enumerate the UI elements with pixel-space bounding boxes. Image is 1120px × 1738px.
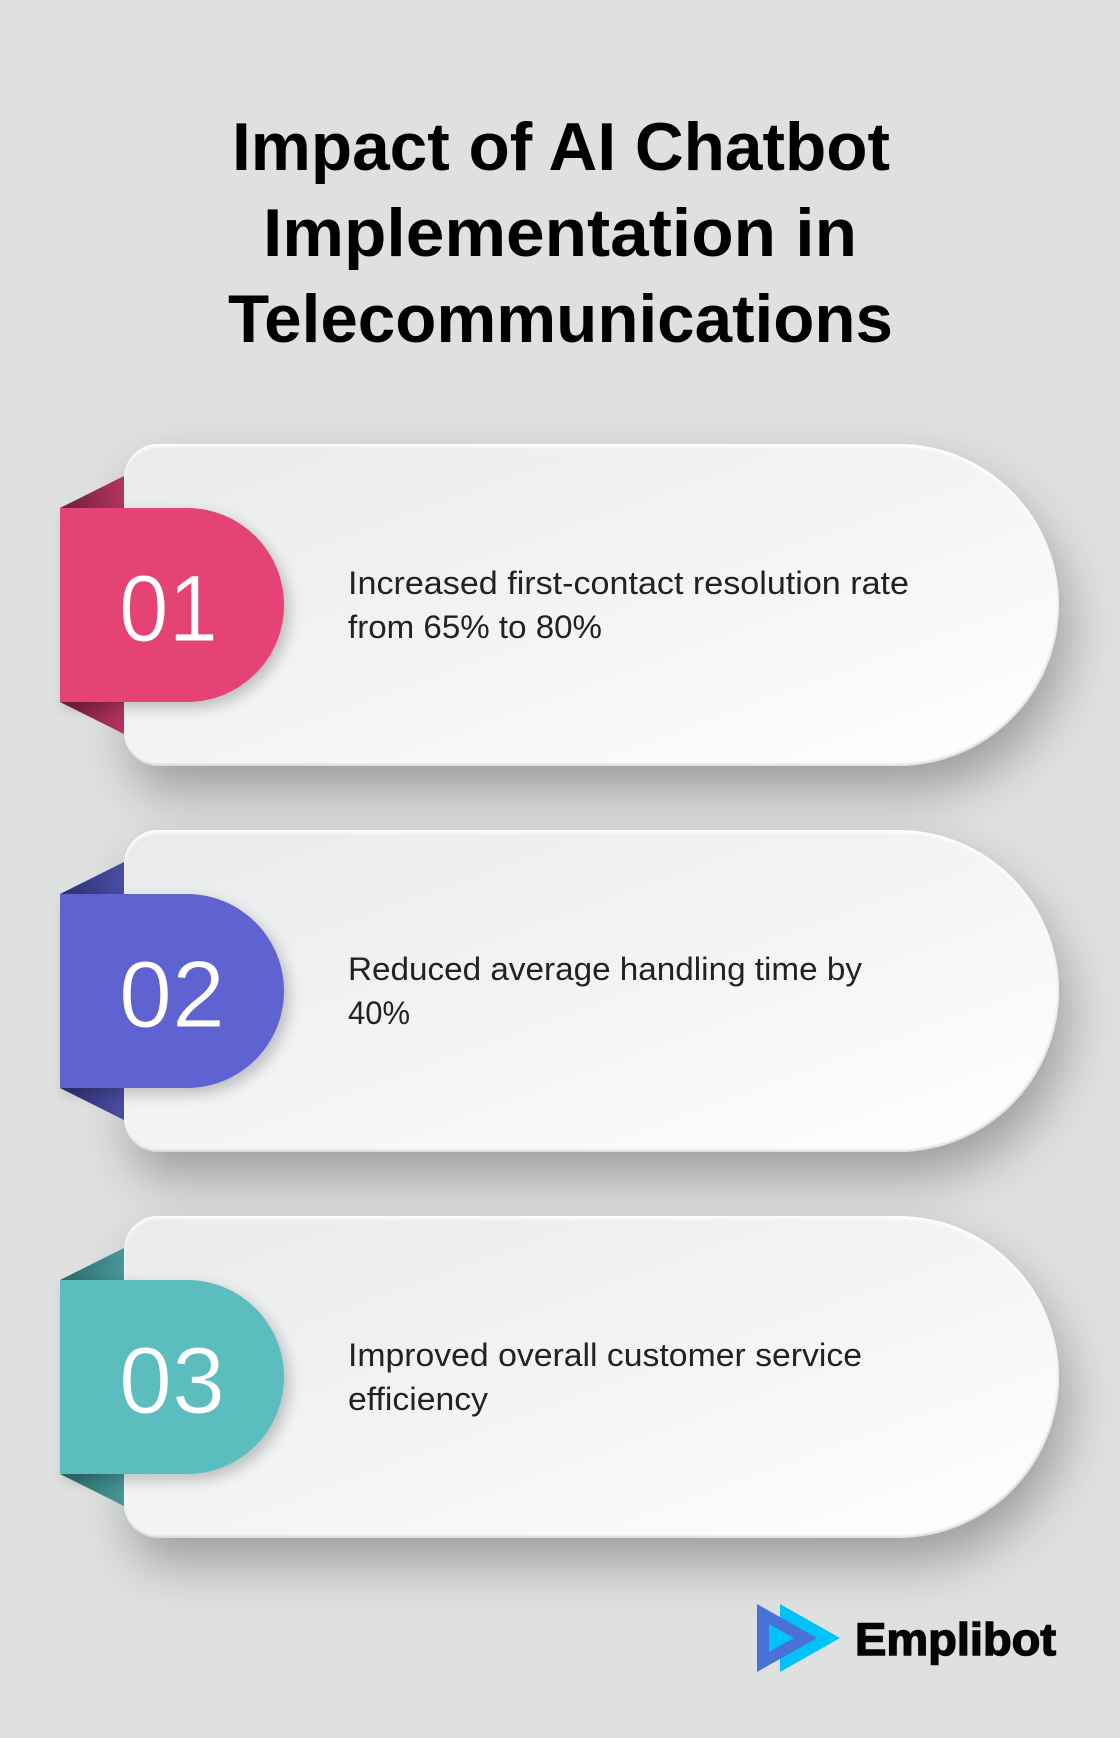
ribbon fold top xyxy=(60,1248,124,1280)
step 01 text: Increased first-contact resolution rate xyxy=(348,565,909,601)
title: Impact of AI Chatbot xyxy=(232,109,890,185)
panel: step 02 xyxy=(58,828,1093,1204)
ribbon fold bottom xyxy=(60,1088,124,1120)
ribbon fold top xyxy=(60,476,124,508)
number badge 02: 02 xyxy=(119,942,225,1048)
wordmark: Emplibot xyxy=(855,1614,1056,1665)
ribbon fold bottom xyxy=(60,1474,124,1506)
logo: Emplibot xyxy=(757,1604,1056,1672)
number badge 03: 03 xyxy=(119,1328,225,1434)
step 03 text: efficiency xyxy=(348,1381,488,1417)
step 02 text: 40% xyxy=(348,995,410,1031)
step 03 text xyxy=(348,1337,862,1417)
step 01 text xyxy=(348,565,909,645)
icon: play triangles xyxy=(757,1604,840,1672)
number badge 01: 01 xyxy=(119,556,218,662)
ribbon fold bottom xyxy=(60,702,124,734)
step 01 text: from 65% to 80% xyxy=(348,609,602,645)
card background xyxy=(124,830,1059,1152)
title: Telecommunications xyxy=(228,281,893,357)
number badge 03 xyxy=(60,1280,284,1474)
panel: step 01 xyxy=(58,442,1093,818)
title: Implementation in xyxy=(263,195,857,271)
step 03 text: Improved overall customer service xyxy=(348,1337,862,1373)
title xyxy=(228,109,893,357)
number badge 01 xyxy=(60,508,284,702)
step 02 text xyxy=(348,951,862,1031)
card background xyxy=(124,444,1059,766)
card background xyxy=(124,1216,1059,1538)
ribbon fold top xyxy=(60,862,124,894)
number badge 02 xyxy=(60,894,284,1088)
panel: step 03 xyxy=(58,1214,1093,1590)
step 02 text: Reduced average handling time by xyxy=(348,951,862,987)
